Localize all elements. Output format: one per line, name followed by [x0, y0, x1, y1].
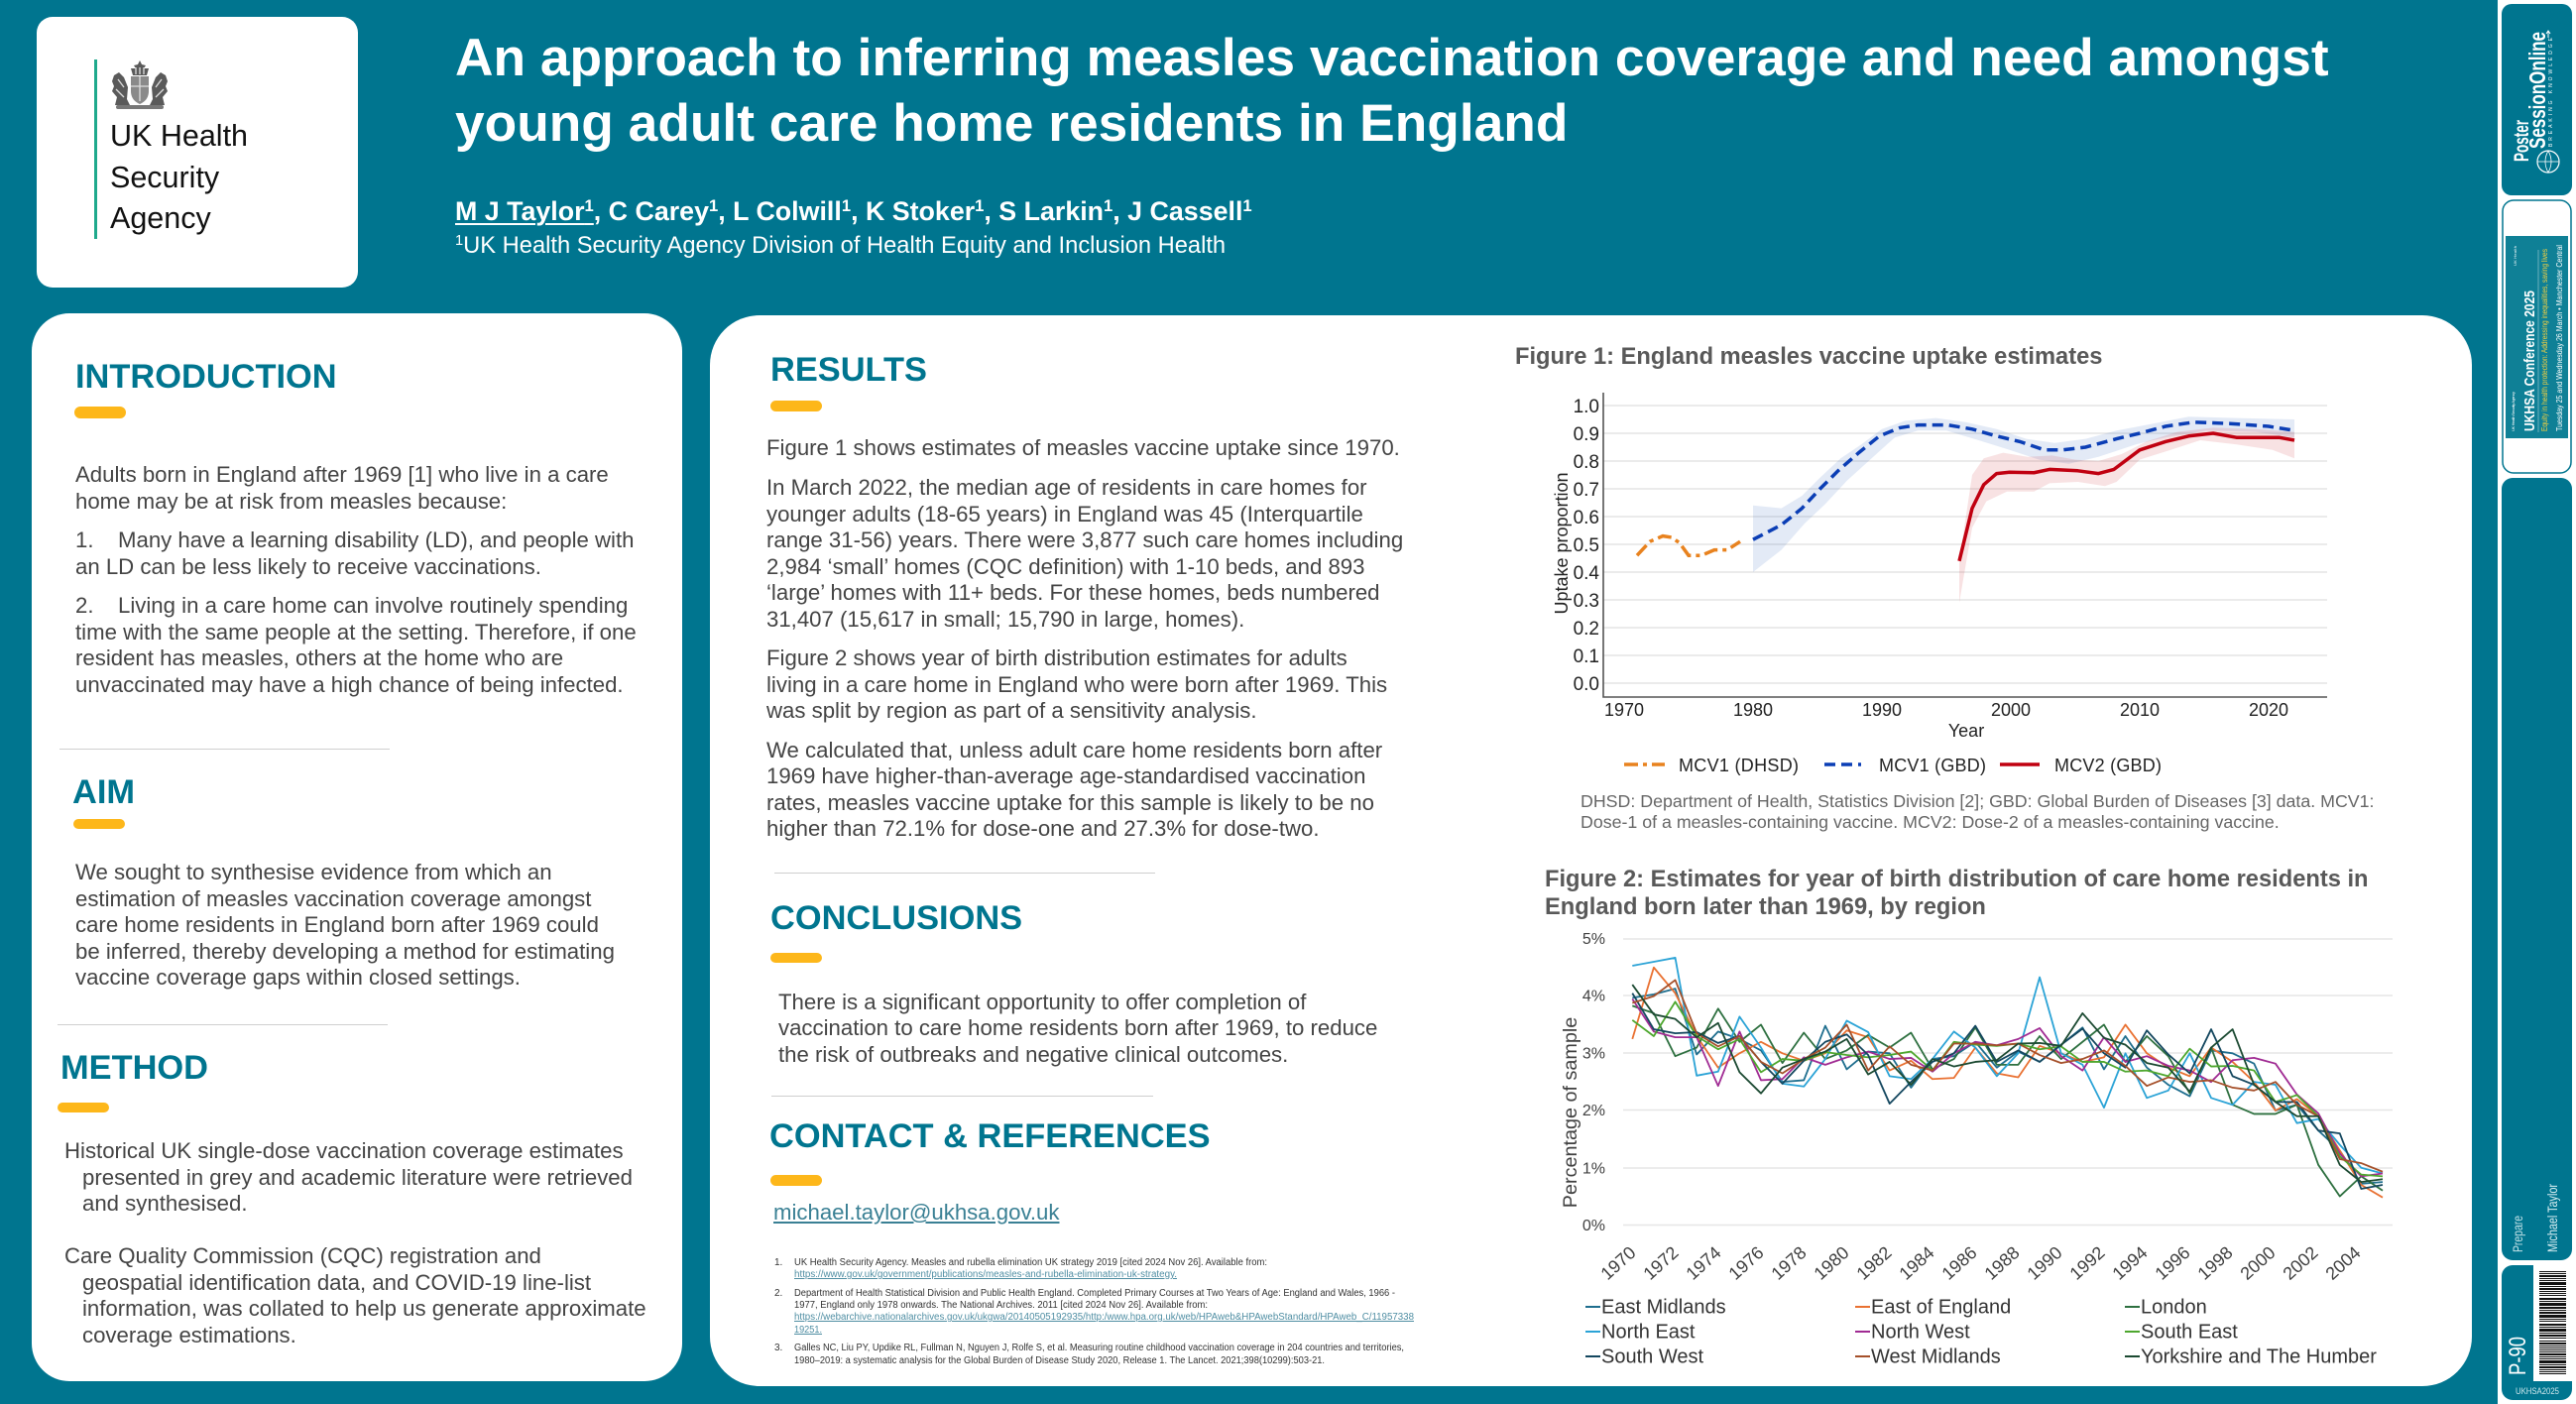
references list: 2. [774, 1288, 782, 1299]
panel: results and figures [710, 315, 2472, 1386]
chart legend: MCV1 (DHSD) [1679, 756, 1799, 775]
text: introduction lead: Adults born in England after 1969 [1] who live in a care [75, 462, 609, 487]
x axis labels: 2000 [1991, 700, 2031, 720]
y axis labels: 0.0 [1574, 674, 1599, 695]
x axis labels: 1984 [1896, 1242, 1938, 1284]
logo card [37, 17, 358, 288]
text: reason 2: 2. [75, 593, 94, 618]
text: reason 1: an LD can be less likely to receive vaccinations. [75, 553, 541, 579]
title: young adult care home residents in England [455, 93, 1568, 153]
text: aim: estimation of measles vaccination coverage amongst [75, 886, 591, 910]
chart legend: West Midlands [1871, 1346, 2001, 1368]
card: presenter: Prepare [2510, 1216, 2525, 1252]
text: results figure 2: Figure 2 shows year of birth distribution estimates for adults [766, 645, 1347, 670]
y axis labels [1582, 931, 1605, 1234]
text: conclusions: There is a significant opportunity to offer completion of [778, 990, 1306, 1013]
x axis labels: 1980 [1811, 1242, 1853, 1284]
logo wordmark: Security [110, 161, 219, 194]
card: UKHSA Conference 2025: UK Health [2513, 246, 2517, 266]
card: poster number and barcode [2502, 1265, 2572, 1400]
chart axes [1603, 393, 2327, 697]
text: results calculation: We calculated that, unless adult care home residents born after [766, 738, 1382, 761]
text: reason 1: Many have a learning disability (LD), and people with [118, 527, 634, 552]
heading: introduction: INTRODUCTION [75, 358, 337, 396]
chart legend: Yorkshire and The Humber [2141, 1346, 2377, 1368]
y axis labels: 1% [1582, 1160, 1605, 1178]
x axis labels: 1988 [1981, 1242, 2024, 1284]
y axis labels: 0.8 [1574, 452, 1599, 473]
card: poster number and barcode: UKHSA2025 [2516, 1386, 2559, 1397]
y axis labels: 0% [1582, 1218, 1605, 1234]
line chart: England measles vaccine uptake [1552, 393, 2327, 775]
panel: introduction, aim, method [32, 313, 682, 1381]
chart legend [1624, 756, 2162, 775]
text: results intro: Figure 1 shows estimates of measles vaccine uptake since 1970. [766, 435, 1400, 460]
band: MCV2 GBD uncertainty [1959, 427, 2294, 603]
text: method step 1: and synthesised. [82, 1191, 248, 1216]
line: East Midlands [1632, 989, 2383, 1184]
line: North East [1632, 958, 2383, 1173]
text: method step 2: Care Quality Commission (CQC) registration and [64, 1243, 541, 1268]
y axis labels: 0.2 [1574, 619, 1599, 640]
heading accent: contact [770, 1175, 822, 1186]
references list: 3. [774, 1343, 782, 1353]
y axis labels [1574, 397, 1599, 695]
chart legend: East of England [1871, 1297, 2011, 1319]
chart legend: North West [1871, 1321, 1970, 1343]
heading: results: RESULTS [770, 351, 927, 389]
x axis labels [1597, 1242, 2365, 1284]
x axis labels: 1994 [2109, 1242, 2152, 1284]
text: reason 2: unvaccinated may have a high chance of being infected. [75, 672, 624, 696]
text: results calculation: higher than 72.1% for dose-one and 27.3% for dose-two. [766, 816, 1320, 841]
y axis labels: 4% [1582, 988, 1605, 1005]
card: UKHSA Conference 2025 [2503, 200, 2571, 473]
x axis title: Year [1948, 721, 1984, 741]
y axis labels: 0.6 [1574, 508, 1599, 528]
text: results calculation [766, 738, 1382, 841]
card: Poster Session Online: BREAKING KNOWLEDGE [2548, 37, 2554, 147]
text: method step 1: Historical UK single-dose vaccination coverage estimates [64, 1138, 624, 1163]
sidebar [2498, 0, 2576, 1404]
data series [1637, 416, 2294, 603]
x axis labels: 1980 [1733, 700, 1773, 720]
contact email: michael.taylor@ukhsa.gov.uk [773, 1200, 1059, 1225]
heading accent: conclusions [770, 953, 822, 963]
card: Poster Session Online: Poster [2511, 120, 2533, 162]
x axis labels: 2020 [2249, 700, 2288, 720]
line: West Midlands [1632, 980, 2383, 1172]
text: results figure 2 [766, 645, 1387, 723]
chart legend: MCV1 (GBD) [1879, 756, 1986, 775]
x axis labels: 1982 [1853, 1242, 1896, 1284]
text: conclusions: vaccination to care home residents born after 1969, to reduce [778, 1015, 1377, 1040]
line: East of England [1632, 968, 2383, 1198]
affiliation: 1UK Health Security Agency Division of Health Equity and Inclusion Health [455, 233, 1226, 259]
icon: royal crest [112, 60, 168, 109]
y axis labels: 0.7 [1574, 480, 1599, 501]
text: results calculation: rates, measles vaccine uptake for this sample is likely to be no [766, 789, 1374, 815]
y axis labels: 1.0 [1574, 397, 1599, 417]
chart legend: East Midlands [1601, 1297, 1726, 1319]
chart legend: North East [1601, 1321, 1696, 1343]
data series [1632, 958, 2383, 1198]
chart grid [1603, 406, 2327, 683]
card: presenter: Michael Taylor [2544, 1184, 2560, 1252]
x axis labels: 2002 [2280, 1242, 2322, 1284]
card: UKHSA Conference 2025: UK Health Security Agency [2511, 392, 2516, 431]
logo wordmark [110, 119, 248, 235]
figure 1 note [1581, 791, 2374, 831]
x axis labels [1604, 700, 2288, 720]
heading: aim: AIM [72, 773, 135, 811]
line: South East [1632, 1001, 2383, 1176]
heading accent: aim [73, 819, 125, 829]
text: aim: be inferred, thereby developing a method for estimating [75, 938, 615, 964]
y axis labels: 0.1 [1574, 646, 1599, 667]
line: South West [1632, 994, 2383, 1189]
chart legend: South West [1601, 1346, 1703, 1368]
text: reason 2 [75, 593, 637, 696]
heading: method: METHOD [60, 1049, 208, 1087]
text: method step 2: geospatial identification data, and COVID-19 line-list [82, 1269, 591, 1295]
y axis labels: 0.5 [1574, 535, 1599, 556]
heading: figure 2: Figure 2: Estimates for year of birth distribution of care home residents in [1545, 867, 2369, 892]
y axis title: Percentage of sample [1560, 1017, 1581, 1208]
y axis labels: 5% [1582, 931, 1605, 948]
text: aim: vaccine coverage gaps within closed settings. [75, 965, 521, 990]
text: results care homes: 31,407 (15,617 in small; 15,790 in large, homes). [766, 607, 1244, 631]
line chart: year of birth distribution by region [1560, 931, 2393, 1368]
text: reason 1 [75, 527, 634, 579]
text: method step 1 [64, 1138, 633, 1216]
text: aim [75, 860, 615, 990]
title: An approach to inferring measles vaccination coverage and need amongst [455, 29, 2329, 87]
card: Poster Session Online [2502, 4, 2572, 195]
references list: https://www.gov.uk/government/publications/measles-and-rubella-elimination-uk-strategy. [794, 1269, 1177, 1280]
heading: figure 2: England born later than 1969, by region [1545, 894, 1986, 920]
text: results calculation: 1969 have higher-than-average age-standardised vaccination [766, 763, 1365, 788]
line: North West [1632, 998, 2383, 1176]
card: UKHSA Conference 2025: Tuesday 25 and Wednesday 26 March • Manchester Central [2555, 245, 2564, 431]
references list: 1977, England only 1978 onwards. The National Archives. 2011 [cited 2024 Nov 26]. Available from: [794, 1300, 1208, 1311]
y axis labels: 0.4 [1574, 563, 1599, 584]
text: method step 2: coverage estimations. [82, 1323, 296, 1346]
text: results care homes: younger adults (18-65 years) in England was 45 (Interquartile [766, 502, 1363, 526]
x axis labels: 1990 [2024, 1242, 2066, 1284]
x axis labels: 1978 [1768, 1242, 1811, 1284]
references list: https://webarchive.nationalarchives.gov.uk/ukgwa/20140505192935/http:/www.hpa.org.uk/web/HPAweb&HPAwebStandard/HPAweb_C/11957338 [794, 1312, 1414, 1323]
x axis labels: 1992 [2066, 1242, 2109, 1284]
y axis title: Uptake proportion [1552, 472, 1572, 615]
chart legend [1585, 1297, 2377, 1368]
logo accent bar [94, 59, 97, 239]
text: reason 2: resident has measles, others at the home who are [75, 645, 563, 670]
text: conclusions: the risk of outbreaks and negative clinical outcomes. [778, 1041, 1288, 1067]
x axis labels: 1990 [1862, 700, 1902, 720]
references list: UK Health Security Agency. Measles and rubella elimination UK strategy 2019 [cited 2024 Nov 26]. Available from: [794, 1257, 1267, 1268]
heading: conclusions: CONCLUSIONS [770, 899, 1022, 937]
text: aim: We sought to synthesise evidence from which an [75, 860, 552, 884]
figure 1 note: DHSD: Department of Health, Statistics Division [2]; GBD: Global Burden of Diseases [3] data. MCV1: [1581, 791, 2374, 811]
text: introduction lead [75, 462, 609, 514]
text: results figure 2: was split by region as part of a sensitivity analysis. [766, 698, 1257, 723]
text: reason 2: Living in a care home can involve routinely spending [118, 593, 628, 618]
references list: 19251. [794, 1325, 822, 1336]
references list: 1. [774, 1257, 782, 1268]
y axis labels: 3% [1582, 1045, 1605, 1063]
text: results care homes: range 31-56) years. There were 3,877 such care homes including [766, 527, 1403, 552]
x axis labels: 1986 [1938, 1242, 1981, 1284]
card: UKHSA Conference 2025: UKHSA Conference 2025 [2521, 291, 2538, 431]
heading: figure 2 [1545, 867, 2369, 920]
line: MCV1 GBD [1753, 422, 2294, 539]
band: MCV1 GBD uncertainty [1753, 416, 2294, 572]
text: introduction lead: home may be at risk from measles because: [75, 488, 507, 514]
chart legend: London [2141, 1297, 2207, 1319]
x axis labels: 2000 [2237, 1242, 2280, 1284]
y axis labels: 0.9 [1574, 424, 1599, 445]
text: results care homes: 2,984 ‘small’ homes (CQC definition) with 1-10 beds, and 893 [766, 553, 1364, 579]
line: MCV1 DHSD [1637, 536, 1740, 555]
authors: M J Taylor1, C Carey1, L Colwill1, K Stoker1, S Larkin1, J Cassell1 [455, 196, 1252, 226]
x axis labels: 1970 [1597, 1242, 1640, 1284]
x axis labels: 1972 [1640, 1242, 1683, 1284]
text: results care homes: ‘large’ homes with 11+ beds. For these homes, beds numbered [766, 580, 1380, 605]
figure 1 note: Dose-1 of a measles-containing vaccine. MCV2: Dose-2 of a measles-containing vaccine. [1581, 811, 2280, 831]
text: method step 2 [64, 1243, 646, 1346]
text: method step 2: information, was collated to help us generate approximate [82, 1296, 646, 1321]
line: Yorkshire and The Humber [1632, 985, 2383, 1182]
x axis labels: 1976 [1725, 1242, 1768, 1284]
x axis labels: 1998 [2194, 1242, 2237, 1284]
card: presenter [2502, 478, 2572, 1260]
text: aim: care home residents in England born after 1969 could [75, 912, 599, 937]
x axis labels: 1974 [1683, 1242, 1725, 1284]
text: results care homes: In March 2022, the median age of residents in care homes for [766, 475, 1367, 500]
x axis labels: 1970 [1604, 700, 1644, 720]
references list: Department of Health Statistical Division and Public Health England. Completed Primary Courses at Two Years of Age: England and Wales, 1966 - [794, 1288, 1395, 1299]
chart legend: MCV2 (GBD) [2054, 756, 2162, 775]
heading: figure 1: Figure 1: England measles vaccine uptake estimates [1515, 344, 2102, 370]
text: reason 1: 1. [75, 527, 94, 552]
chart legend: South East [2141, 1321, 2238, 1343]
line: MCV2 GBD [1959, 433, 2294, 561]
text: method step 1: presented in grey and academic literature were retrieved [82, 1164, 633, 1190]
line: London [1632, 1005, 2383, 1197]
x axis labels: 2010 [2120, 700, 2160, 720]
x axis labels: 1996 [2152, 1242, 2194, 1284]
x axis labels: 2004 [2322, 1242, 2365, 1284]
chart grid [1623, 939, 2393, 1226]
logo wordmark: Agency [110, 201, 211, 235]
text: results care homes [766, 475, 1403, 631]
references list [774, 1257, 1414, 1366]
references list: 1980–2019: a systematic analysis for the Global Burden of Disease Study 2020, Release 1. The Lancet. 2021;398(10299):503-21. [794, 1355, 1325, 1366]
heading accent: results [770, 401, 822, 411]
y axis labels: 2% [1582, 1103, 1605, 1119]
text: reason 2: time with the same people at the setting. Therefore, if one [75, 619, 637, 644]
heading accent: introduction [74, 407, 126, 418]
card: poster number and barcode: P-90 [2505, 1337, 2531, 1375]
card: UKHSA Conference 2025: Equity in health protection: Addressing inequalities, saving lives [2540, 249, 2549, 431]
text: results figure 2: living in a care home in England who were born after 1969. This [766, 672, 1387, 696]
logo wordmark: UK Health [110, 119, 248, 153]
y axis labels: 0.3 [1574, 591, 1599, 612]
title [455, 29, 2329, 153]
heading: contact and references: CONTACT & REFERENCES [769, 1117, 1211, 1155]
text: conclusions [778, 990, 1377, 1067]
heading accent: method [58, 1103, 109, 1112]
